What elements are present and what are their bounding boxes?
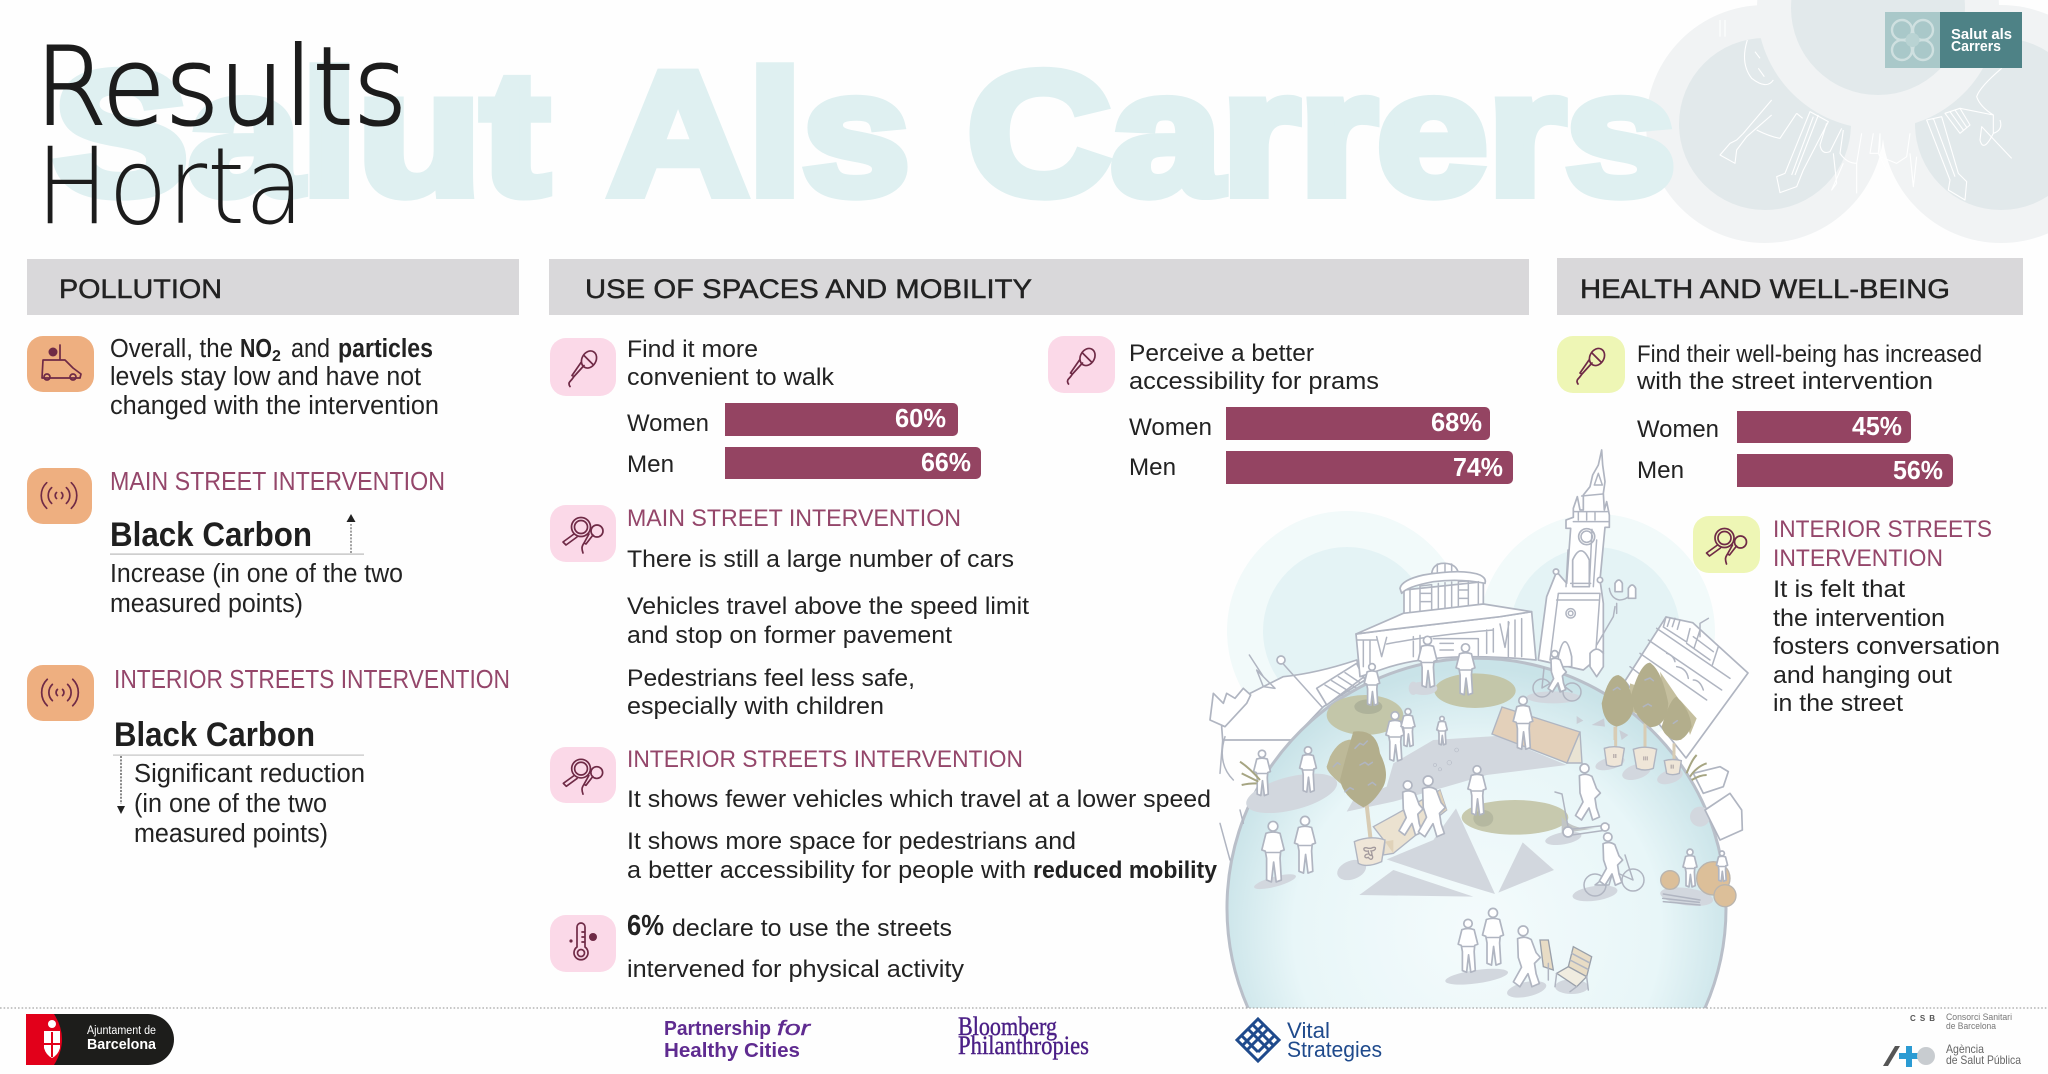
- hill, zebra and church: [1210, 655, 1365, 773]
- logo: Ajuntament de Barcelona: Ajuntament de: [87, 1025, 156, 1037]
- main street intervention result: measured points): [110, 590, 303, 618]
- tilted building: [1625, 617, 1748, 758]
- main street intervention result: MAIN STREET INTERVENTION: [110, 466, 445, 496]
- text: interior streets well-being: fosters conversation: [1773, 633, 2000, 660]
- text: interior streets well-being: [1773, 516, 2000, 717]
- chart: well-being: Women: [1637, 416, 1719, 443]
- lower scene: ground shapes: [1242, 736, 1714, 1001]
- text: interior streets well-being: INTERIOR STREETS: [1773, 516, 1992, 543]
- balls and steps: [1661, 862, 1736, 907]
- upper right trees: [1602, 663, 1697, 741]
- interior streets intervention result: Significant reduction: [134, 760, 365, 788]
- text: main street findings: There is still a large number of cars: [627, 546, 1014, 573]
- icon: microphone walk: [550, 338, 616, 396]
- text: no2 and particles: levels stay low and have not: [110, 363, 421, 391]
- text: main street findings: especially with children: [627, 693, 884, 720]
- chart: well-being: with the street intervention: [1636, 368, 1933, 395]
- logo: Partnership for Healthy Cities: Healthy Cities: [664, 1039, 800, 1062]
- text: interior streets findings: [627, 746, 1218, 884]
- text: no2 and particles: NO: [240, 335, 272, 363]
- chart: well-being: 45%: [1852, 411, 1902, 441]
- panel header: use of spaces and mobility: [549, 259, 1529, 315]
- text: physical activity: [627, 910, 964, 983]
- back circles: [1227, 511, 1715, 751]
- watermark: Salut Als Carrers: Carrers: [967, 37, 1676, 232]
- text: interior streets well-being: and hanging out: [1773, 662, 1952, 689]
- chart: accessibility for prams: Women: [1129, 414, 1212, 441]
- chart: convenient to walk: Find it more: [627, 336, 758, 363]
- text: interior streets well-being: the intervention: [1773, 605, 1945, 632]
- panel header: health and well-being: HEALTH AND WELL-BEING: [1580, 274, 1950, 304]
- logo: Ajuntament de Barcelona: [26, 1014, 174, 1065]
- chart: accessibility for prams: accessibility for prams: [1129, 368, 1379, 395]
- logo: Bloomberg Philanthropies: Bloomberg: [958, 1012, 1057, 1041]
- clock tower: [1538, 450, 1636, 677]
- text: interior streets findings: reduced mobility: [1033, 857, 1218, 884]
- logo: Agencia de Salut Publica: Agència: [1946, 1042, 1984, 1056]
- title: [35, 25, 407, 248]
- chart: convenient to walk: [627, 336, 981, 479]
- panel: pollution: [27, 335, 510, 848]
- text: interior streets findings: It shows fewer vehicles which travel at a lower speed: [627, 786, 1211, 813]
- interior streets intervention result: INTERIOR STREETS INTERVENTION: [114, 664, 510, 694]
- text: main street findings: Vehicles travel above the speed limit: [627, 593, 1029, 620]
- logo: Vital Strategies: Strategies: [1287, 1037, 1382, 1062]
- chart: convenient to walk: 66%: [921, 447, 971, 477]
- text: interior streets well-being: in the street: [1773, 690, 1903, 717]
- logo: Agencia de Salut Publica: de Salut Pública: [1946, 1053, 2021, 1067]
- pavilion building: [1356, 563, 1536, 677]
- bench and trees: [1327, 727, 1681, 865]
- upper scene: ellipses, tent and people: [1327, 673, 1628, 740]
- logo: Partnership for Healthy Cities: for: [777, 1017, 812, 1040]
- text: physical activity: 6%: [627, 910, 664, 942]
- icon: magnifier and mic well-being: [1693, 516, 1760, 573]
- text: interior streets findings: It shows more space for pedestrians and: [627, 828, 1076, 855]
- logo: Consorci Sanitari de Barcelona: [1910, 1012, 2012, 1031]
- chart: convenient to walk: Women: [627, 410, 709, 437]
- text: interior streets well-being: INTERVENTION: [1773, 545, 1943, 572]
- logo: Bloomberg Philanthropies: Philanthropies: [958, 1031, 1089, 1060]
- interior streets intervention result: [113, 664, 510, 848]
- logo: Vital Strategies: [1237, 1018, 1382, 1062]
- chart: accessibility for prams: Perceive a better: [1129, 340, 1314, 367]
- text: interior streets findings: INTERIOR STREETS INTERVENTION: [627, 746, 1023, 773]
- tent: [1492, 707, 1582, 763]
- logo: Agencia de Salut Publica: [1883, 1042, 2021, 1067]
- chart: well-being: [1636, 341, 1982, 487]
- background circles top right: [1646, 0, 2048, 243]
- icon: microphone prams: [1048, 336, 1115, 393]
- logo: Consorci Sanitari de Barcelona: de Barcelona: [1946, 1021, 1996, 1031]
- icon: measuring car: [27, 336, 94, 392]
- main street intervention result: Increase (in one of the two: [110, 560, 403, 588]
- people: [1254, 636, 1728, 987]
- chairs: [1540, 940, 1592, 992]
- chart: accessibility for prams: Men: [1129, 454, 1176, 481]
- logo: Bloomberg Philanthropies: [958, 1012, 1089, 1060]
- watermark: Salut Als Carrers: Als: [608, 37, 910, 232]
- logo: Salut als Carrers: Carrers: [1951, 38, 2001, 55]
- text: interior streets well-being: It is felt that: [1773, 576, 1905, 603]
- chart: convenient to walk: 60%: [895, 403, 946, 433]
- logo: Partnership for Healthy Cities: [664, 1017, 812, 1062]
- illustration: city globe: [1210, 450, 1748, 1008]
- panel header: pollution: [27, 259, 519, 315]
- logo: Salut als Carrers: [1885, 12, 2022, 68]
- right edge figures and plants: [1220, 737, 1742, 860]
- panel: health and well-being: [1557, 336, 2000, 717]
- chart: convenient to walk: Men: [627, 451, 674, 478]
- text: no2 and particles: and: [291, 335, 330, 363]
- globe: [1227, 658, 1726, 1008]
- text: main street findings: and stop on former pavement: [627, 622, 952, 649]
- text: no2 and particles: changed with the intervention: [110, 392, 439, 420]
- logo: Consorci Sanitari de Barcelona: Consorci Sanitari: [1946, 1012, 2012, 1022]
- icon: sensor interior streets: [27, 665, 94, 721]
- chart: convenient to walk: convenient to walk: [627, 364, 835, 391]
- interior streets intervention result: measured points): [134, 820, 328, 848]
- chart: accessibility for prams: 74%: [1453, 452, 1503, 482]
- panel header: health and well-being: [1557, 258, 2023, 315]
- text: no2 and particles: Overall, the: [110, 335, 233, 363]
- panel header: pollution: POLLUTION: [59, 274, 222, 304]
- text: main street findings: MAIN STREET INTERVENTION: [627, 505, 961, 532]
- text: no2 and particles: 2: [272, 348, 281, 365]
- chart: well-being: 56%: [1893, 455, 1943, 485]
- title: Results: [35, 25, 407, 150]
- watermark: Salut Als Carrers: [53, 37, 1676, 232]
- chart: accessibility for prams: [1129, 340, 1513, 484]
- icon: thermometer: [550, 915, 616, 972]
- main street intervention result: [110, 466, 445, 618]
- icon: magnifier and mic main street: [550, 505, 616, 562]
- logo: Partnership for Healthy Cities: Partnership: [664, 1017, 771, 1040]
- text: no2 and particles: [110, 335, 439, 420]
- title: Horta: [36, 125, 304, 248]
- logo: Salut als Carrers: Salut als: [1951, 26, 2012, 43]
- icon: sensor main street: [27, 468, 92, 524]
- panel header: use of spaces and mobility: USE OF SPACES AND MOBILITY: [585, 274, 1032, 304]
- text: physical activity: intervened for physical activity: [627, 956, 964, 983]
- logo: Vital Strategies: Vital: [1287, 1018, 1330, 1043]
- text: no2 and particles: particles: [338, 335, 433, 363]
- text: main street findings: [627, 505, 1029, 720]
- text: interior streets findings: a better accessibility for people with: [627, 857, 1026, 884]
- interior streets intervention result: (in one of the two: [134, 790, 327, 818]
- interior streets intervention result: Black Carbon: [114, 716, 315, 754]
- chart: well-being: Find their well-being has increased: [1637, 341, 1982, 368]
- watermark: Salut Als Carrers: Salut: [53, 37, 549, 232]
- chart: well-being: Men: [1637, 457, 1684, 484]
- text: physical activity: declare to use the streets: [672, 915, 952, 942]
- chart: accessibility for prams: 68%: [1431, 407, 1482, 437]
- panel: use of spaces and mobility: [550, 336, 1513, 983]
- main street intervention result: Black Carbon: [110, 516, 312, 554]
- text: main street findings: Pedestrians feel less safe,: [627, 665, 915, 692]
- bikes and scooter: [1533, 668, 1644, 896]
- icon: microphone well-being: [1557, 336, 1625, 393]
- logo: Consorci Sanitari de Barcelona: CSB: [1910, 1014, 1935, 1023]
- logo: Ajuntament de Barcelona: Barcelona: [87, 1036, 157, 1053]
- buildings behind globe: [1210, 450, 1748, 773]
- icon: magnifier and mic interior streets: [550, 747, 616, 803]
